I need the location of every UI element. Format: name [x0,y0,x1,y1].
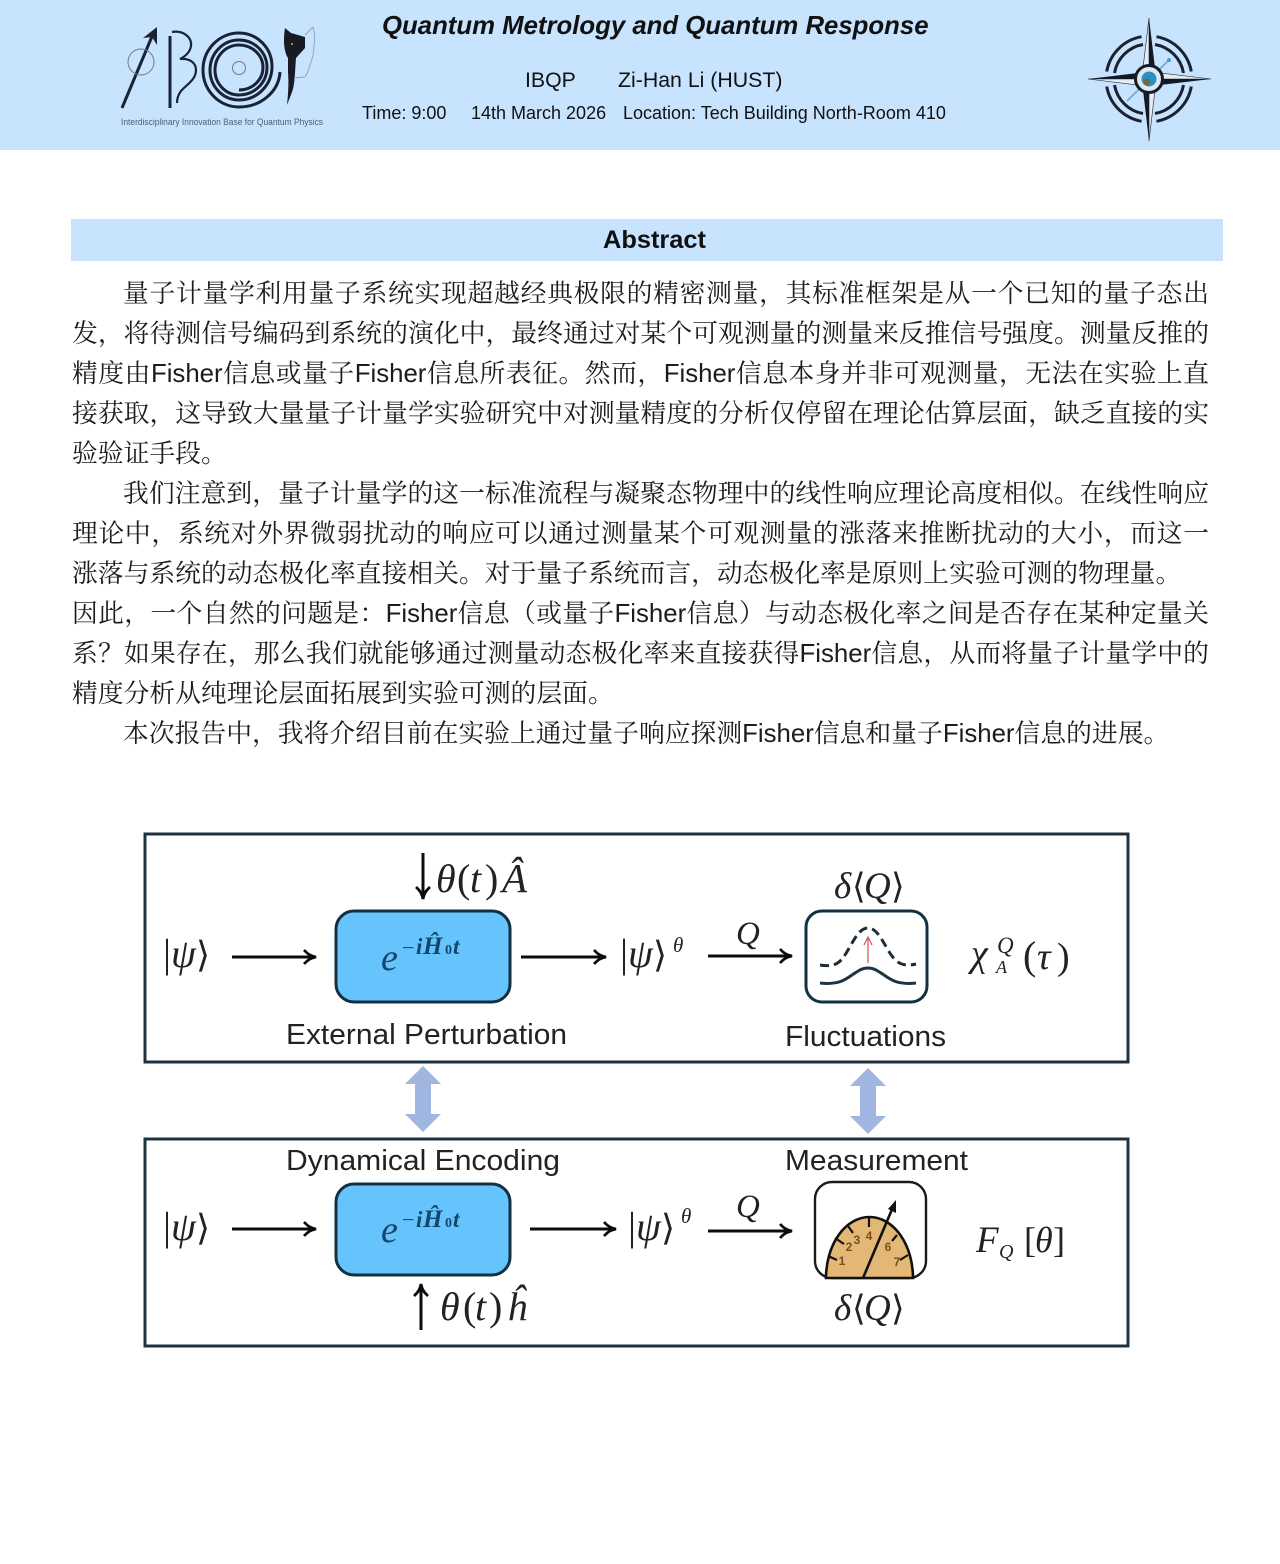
abstract body text: 涨落与系统的动态极化率直接相关。对于量子系统而言，动态极化率是原则上实验可测的物理量。 [72,560,1181,588]
abstract heading [71,219,1223,261]
arrow: state to meter [708,1230,792,1232]
time and location: Location: Tech Building North-Room 410 [623,103,946,123]
quantum Fisher information: ] [1053,1220,1065,1260]
evolution box [336,911,510,1002]
evolution box: Ĥ [422,1205,444,1233]
arrow: input to evolution [232,1228,316,1230]
abstract body text [72,280,1209,748]
arrow: state to fluctuations [708,954,792,958]
quantum Fisher information: F [975,1220,999,1261]
abstract body text: 发，将待测信号编码到系统的演化中，最终通过对某个可观测量的测量来反推信号强度。测量反推的 [72,320,1209,348]
evolution box: e [381,1209,398,1251]
encoding label: ) [489,1284,502,1329]
operator label Q: Q [736,916,760,952]
meter icon: 7 [894,1255,901,1269]
input state: | [163,931,171,976]
evolution box: t [453,1207,460,1232]
header band [0,0,1280,150]
evolution box: 0 [445,1216,452,1231]
time and location [362,103,946,123]
delta Q label: ⟩ [891,1289,905,1328]
input state: ⟩ [196,935,210,975]
logo: compass [1088,18,1211,141]
time and location: Time: 9:00 [362,103,446,123]
meter icon: 2 [846,1240,853,1254]
arrow: input to evolution [232,956,316,958]
operator label Q: Q [736,1189,760,1225]
response function: χ [967,933,989,975]
encoding label: θ [440,1284,460,1329]
input state: ψ [171,931,197,976]
encoded state: θ [673,933,683,957]
logo: IBQP: Interdisciplinary Innovation Base for Quantum Physics [121,117,323,127]
label: measurement: Measurement [785,1145,968,1177]
evolution box: 0 [445,943,452,958]
delta Q label: Q [864,1288,891,1329]
abstract heading: Abstract [603,226,706,254]
logo: IBQP [120,26,323,127]
meter icon: 1 [839,1254,846,1268]
evolution box: Ĥ [422,932,444,960]
abstract body text: 系？如果存在，那么我们就能够通过测量动态极化率来直接获得Fisher信息，从而将量子计量学中的 [72,640,1209,668]
perturbation label: t [470,856,482,901]
evolution box: i [416,934,423,959]
encoded state: ψ [636,1204,662,1249]
evolution box: t [453,934,460,959]
arrow: evolution to state [530,1228,616,1230]
abstract body text: 精度由Fisher信息或量子Fisher信息所表征。然而，Fisher信息本身并非可观测量，无法在实验上直 [72,360,1209,388]
input state: | [163,1204,171,1249]
organiser and speaker: IBQP [525,68,576,92]
encoded state: | [620,931,628,976]
delta Q label: δ [834,866,852,907]
evolution box [336,1184,510,1275]
quantum Fisher information: [ [1024,1220,1036,1260]
abstract body text: 验验证手段。 [72,440,227,468]
meter icon: 6 [885,1240,892,1254]
panel: dynamical encoding and measurement [145,1139,1128,1346]
encoding label: ĥ [507,1284,528,1329]
encoded state: ⟩ [653,935,667,975]
meter icon [815,1182,926,1278]
encoded state: ψ [628,931,654,976]
label: external perturbation: External Perturbation [286,1019,567,1051]
perturbation label: Â [499,855,528,901]
evolution box: − [402,935,414,960]
delta Q label: ⟨ [852,1289,866,1328]
encoding label: ( [463,1284,476,1329]
panel: external perturbation and fluctuations [145,834,1128,1062]
arrow: evolution to state [521,956,606,958]
perturbation label: ( [457,856,470,901]
quantum Fisher information: Q [999,1241,1014,1263]
input state: ⟩ [196,1208,210,1248]
arrow: encoding signal [420,1284,422,1330]
label: dynamical encoding: Dynamical Encoding [286,1145,560,1177]
abstract body text: 我们注意到，量子计量学的这一标准流程与凝聚态物理中的线性响应理论高度相似。在线性响应 [123,480,1209,508]
diagram: linear response and quantum metrology [144,832,1130,1348]
encoded state: θ [681,1204,691,1228]
abstract body text: 因此，一个自然的问题是：Fisher信息（或量子Fisher信息）与动态极化率之间是否存在某种定量关 [72,600,1209,628]
delta Q label: ⟨ [852,867,866,906]
encoded state: ⟩ [661,1208,675,1248]
delta Q label: δ [834,1288,852,1329]
abstract body text: 接获取，这导致大量量子计量学实验研究中对测量精度的分析仅停留在理论估算层面，缺乏直接的实 [72,400,1209,428]
perturbation label: ) [485,856,498,901]
abstract body text: 理论中，系统对外界微弱扰动的响应可以通过测量某个可观测量的涨落来推断扰动的大小，而这一 [72,520,1209,548]
abstract body text: 量子计量学利用量子系统实现超越经典极限的精密测量，其标准框架是从一个已知的量子态出 [123,280,1209,308]
time and location: 14th March 2026 [471,103,606,123]
double arrow: left [405,1066,441,1132]
input state: ψ [171,1204,197,1249]
delta Q label: ⟩ [891,867,905,906]
organiser and speaker [525,68,782,92]
evolution box: i [416,1207,423,1232]
meter icon: 4 [866,1229,873,1243]
double arrow: right [850,1068,886,1134]
evolution box: − [402,1207,414,1232]
response function: ( [1023,933,1036,978]
response function: Q [997,933,1014,958]
label: fluctuations: Fluctuations [785,1021,946,1053]
encoded state: | [628,1204,636,1249]
response function: τ [1037,936,1052,978]
title: Quantum Metrology and Quantum Response [382,12,929,40]
fluctuations icon [806,911,927,1002]
perturbation label: θ [436,856,456,901]
organiser and speaker: Zi-Han Li (HUST) [618,68,782,92]
meter icon: 3 [854,1233,861,1247]
evolution box: e [381,937,398,979]
abstract body text: 本次报告中，我将介绍目前在实验上通过量子响应探测Fisher信息和量子Fisher信息的进展。 [123,720,1169,748]
delta Q label: Q [864,866,891,907]
quantum Fisher information: θ [1035,1220,1053,1260]
arrow: perturbation [422,853,424,899]
response function: ) [1057,936,1070,978]
response function: A [995,957,1008,977]
encoding label: t [475,1284,487,1329]
abstract body text: 精度分析从纯理论层面拓展到实验可测的层面。 [72,680,614,708]
